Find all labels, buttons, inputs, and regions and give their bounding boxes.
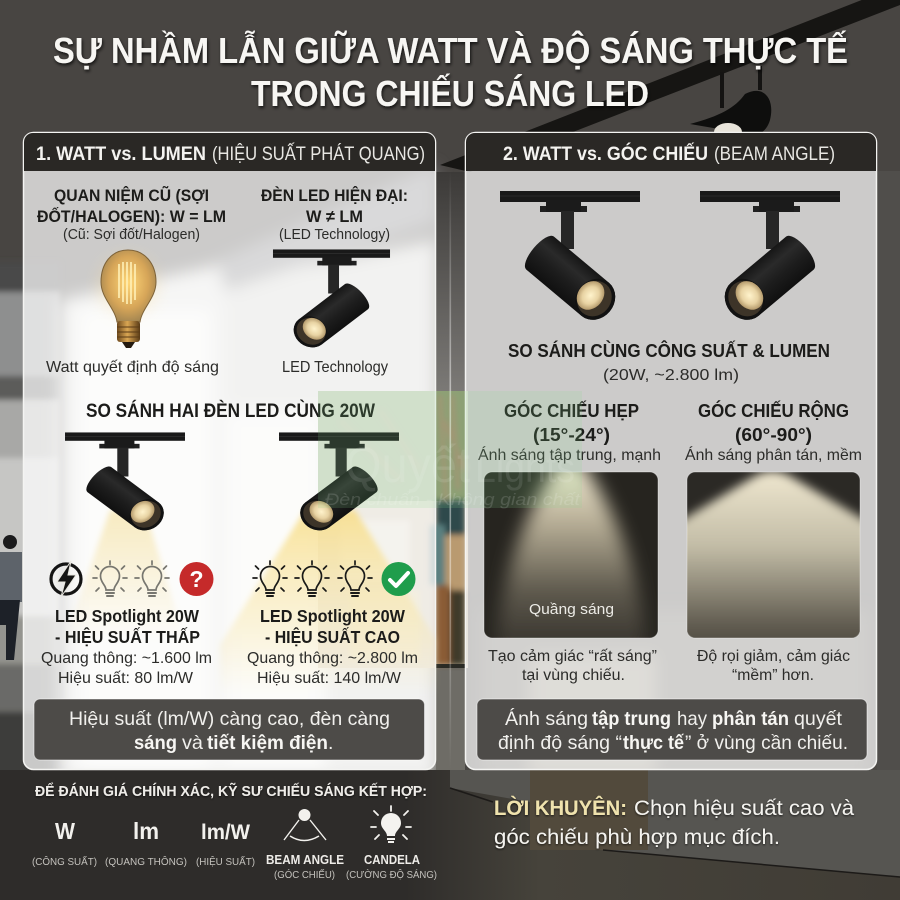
callout: beam takeaway: tập trung	[592, 708, 671, 730]
metric: lumen	[105, 818, 187, 868]
icon: LED spotlight	[273, 249, 390, 354]
light cone: weak	[65, 510, 185, 640]
wide beam caption	[697, 648, 850, 684]
advice text: Chọn hiệu suất cao và	[634, 797, 854, 820]
callout: efficiency takeaway: và	[182, 732, 203, 754]
callout: efficiency takeaway: Hiệu suất (lm/W) càng cao, đèn càng	[69, 708, 390, 730]
spec text: low efficiency: LED Spotlight 20W	[55, 606, 199, 626]
callout: efficiency takeaway: sáng	[134, 732, 177, 754]
wide beam heading: Ánh sáng phân tán, mềm	[685, 445, 862, 464]
spec text: low efficiency: - HIỆU SUẤT THẤP	[55, 626, 200, 647]
metric: candela: (CƯỜNG ĐỘ SÁNG)	[346, 868, 437, 881]
metric: watt: (CÔNG SUẤT)	[32, 855, 97, 868]
spec text: low efficiency	[41, 606, 212, 687]
caption: LED technology: LED Technology	[282, 359, 388, 376]
floor band	[0, 770, 900, 900]
callout: beam takeaway: ” ở vùng cần chiếu.	[685, 732, 848, 754]
metric: efficacy: lm/W	[201, 821, 250, 844]
comparison heading: SO SÁNH HAI ĐÈN LED CÙNG 20W	[86, 400, 375, 422]
painting on gallery wall	[318, 391, 468, 668]
spec text: low efficiency: Hiệu suất: 80 lm/W	[58, 670, 194, 687]
wide beam heading	[685, 400, 862, 464]
icon: spotlight narrow	[500, 191, 640, 328]
watermark overlay: Đèn chuẩn - Không gian chất	[325, 490, 581, 509]
icon: bright bulbs	[253, 561, 372, 596]
callout: beam takeaway: hay	[677, 708, 707, 730]
spec text: low efficiency: Quang thông: ~1.600 lm	[41, 650, 212, 667]
high efficiency column	[220, 432, 436, 695]
callout: efficiency takeaway	[34, 699, 424, 760]
caption: watt decides brightness: Watt quyết định độ sáng	[46, 359, 219, 376]
callout: beam takeaway: phân tán	[712, 708, 789, 730]
icon: dim bulbs	[93, 561, 169, 596]
callout: beam takeaway: định độ sáng “	[498, 732, 622, 754]
wide beam heading: GÓC CHIẾU RỘNG	[698, 400, 849, 421]
comparison heading: SO SÁNH CÙNG CÔNG SUẤT & LUMEN	[508, 340, 830, 361]
metric: watt: W	[55, 818, 75, 844]
callout: beam takeaway: thực tế	[623, 732, 684, 754]
comparison heading: (20W, ~2.800 lm)	[603, 367, 739, 384]
narrow beam heading: (15°-24°)	[533, 425, 610, 445]
narrow beam heading: Ánh sáng tập trung, mạnh	[478, 445, 661, 464]
spec text: high efficiency: Quang thông: ~2.800 lm	[247, 650, 418, 667]
metric: efficacy	[196, 821, 255, 868]
light cone: strong	[220, 510, 436, 695]
callout: efficiency takeaway: tiết kiệm điện	[207, 732, 328, 754]
panel header	[24, 133, 435, 171]
narrow beam caption: tại vùng chiếu.	[522, 667, 625, 684]
icon: power bolt	[51, 561, 81, 597]
icon: question badge	[180, 562, 214, 596]
panel header: (HIỆU SUẤT PHÁT QUANG)	[212, 142, 425, 165]
modern LED heading: (LED Technology)	[279, 227, 390, 243]
title: TRONG CHIẾU SÁNG LED	[251, 73, 649, 114]
callout: efficiency takeaway: .	[328, 732, 333, 754]
spec text: high efficiency: Hiệu suất: 140 lm/W	[257, 670, 402, 687]
wide beam caption: “mềm” hơn.	[732, 667, 814, 684]
modern LED heading: W ≠ LM	[306, 207, 363, 226]
watermark overlay: Lights	[475, 444, 575, 491]
old concept heading: ĐỐT/HALOGEN): W = LM	[37, 206, 226, 226]
panel header: 2. WATT vs. GÓC CHIẾU	[503, 141, 708, 165]
visitor silhouette	[0, 535, 22, 660]
watermark overlay	[318, 391, 582, 509]
wide beam caption: Độ rọi giảm, cảm giác	[697, 648, 850, 665]
icon: question badge: ?	[189, 566, 204, 592]
narrow beam caption	[488, 648, 657, 684]
comparison heading	[508, 340, 830, 384]
metric: candela	[346, 806, 437, 881]
modern LED heading: ĐÈN LED HIỆN ĐẠI:	[261, 186, 408, 205]
callout: beam takeaway	[477, 699, 867, 760]
metric: candela: CANDELA	[364, 853, 420, 867]
icon: filament bulb	[98, 250, 158, 348]
label: halo: Quầng sáng	[529, 601, 614, 618]
watermark overlay: Quyết	[345, 437, 470, 493]
metric: beam angle	[266, 809, 344, 881]
metric: efficacy: (HIỆU SUẤT)	[196, 855, 255, 868]
icon: spotlight low	[65, 432, 185, 537]
left margin wall	[0, 262, 60, 782]
wide beam heading: (60°-90°)	[735, 425, 812, 445]
seam glow	[450, 170, 451, 770]
narrow beam heading: GÓC CHIẾU HẸP	[504, 400, 639, 421]
narrow beam light image	[484, 472, 658, 638]
centre gap wall	[436, 172, 465, 391]
panel: watt vs lumen	[24, 132, 436, 770]
bottom metrics section	[32, 782, 437, 881]
advice text: LỜI KHUYÊN:	[494, 796, 627, 820]
narrow beam heading	[478, 400, 661, 464]
spec text: high efficiency: - HIỆU SUẤT CAO	[265, 626, 400, 647]
modern LED heading	[261, 186, 408, 243]
old concept heading	[37, 185, 226, 243]
metrics heading: ĐỂ ĐÁNH GIÁ CHÍNH XÁC, KỸ SƯ CHIẾU SÁNG KẾT HỢP:	[35, 782, 427, 800]
old concept heading: (Cũ: Sợi đốt/Halogen)	[63, 227, 200, 243]
panel header: (BEAM ANGLE)	[714, 143, 835, 165]
advice text	[494, 796, 854, 849]
metric: watt	[32, 818, 97, 868]
spec text: high efficiency	[247, 606, 418, 687]
right margin wall	[877, 171, 900, 771]
panel header: 1. WATT vs. LUMEN	[36, 143, 206, 165]
low efficiency column	[41, 432, 214, 687]
icon: spotlight wide	[700, 191, 840, 328]
panel header	[466, 133, 876, 171]
metric: lumen: lm	[133, 818, 159, 844]
icon: spotlight high	[279, 432, 399, 537]
callout: beam takeaway: quyết	[794, 708, 843, 730]
metric: lumen: (QUANG THÔNG)	[105, 855, 187, 868]
icon: check badge	[382, 562, 416, 596]
wide beam light image	[686, 472, 860, 638]
narrow beam caption: Tạo cảm giác “rất sáng”	[488, 648, 657, 665]
metric: beam angle: (GÓC CHIẾU)	[274, 868, 335, 881]
spec text: high efficiency: LED Spotlight 20W	[260, 606, 405, 626]
title	[53, 29, 848, 114]
advice text: góc chiếu phù hợp mục đích.	[494, 826, 780, 849]
old concept heading: QUAN NIỆM CŨ (SỢI	[54, 185, 209, 205]
ceiling track and lamp	[440, 0, 900, 172]
panel: watt vs beam angle	[466, 132, 885, 770]
callout: beam takeaway: Ánh sáng	[505, 707, 588, 730]
metric: beam angle: BEAM ANGLE	[266, 853, 344, 867]
